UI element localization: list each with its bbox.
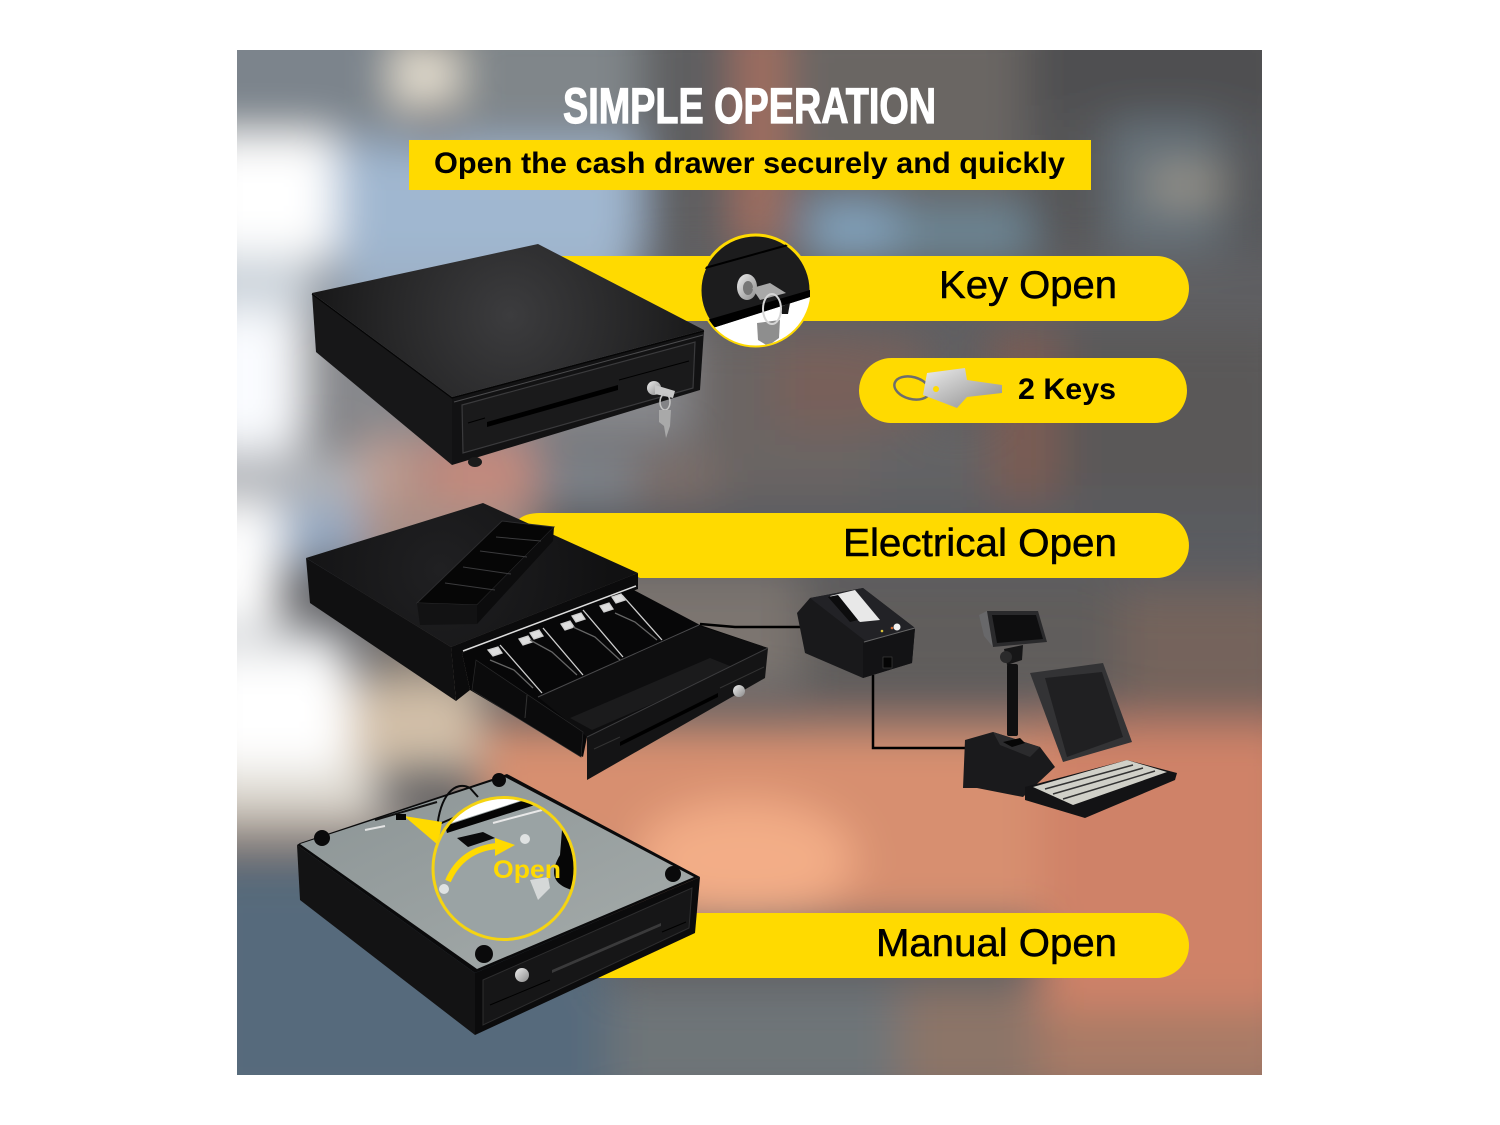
banner: electrical open	[518, 513, 1189, 578]
title: SIMPLE OPERATION	[563, 78, 936, 134]
banner: manual open: Manual Open	[876, 922, 1117, 965]
lower mid	[190, 505, 280, 635]
icon: key	[892, 368, 1002, 408]
pointer to release	[404, 816, 442, 845]
drawer: open with tray	[306, 503, 768, 780]
inset: key in lock	[702, 234, 810, 348]
keyboard	[1025, 760, 1177, 818]
money clips	[463, 586, 662, 693]
label: open: Open	[493, 856, 561, 884]
coin tray	[417, 521, 554, 625]
infographic: simple operation	[237, 50, 1262, 1075]
pill: 2 keys: 2 Keys	[1018, 373, 1116, 406]
banner: key open	[540, 256, 1189, 321]
drawer: closed with key	[312, 244, 704, 467]
mid band	[190, 310, 300, 450]
banner: manual open	[595, 913, 1189, 978]
coin compartment	[538, 626, 768, 737]
top row	[237, 50, 424, 162]
pill: 2 keys	[859, 358, 1187, 423]
blurred store background	[237, 50, 1262, 1075]
arrow: open direction	[448, 838, 515, 881]
printer	[797, 588, 915, 678]
cable: printer to POS terminal	[873, 675, 968, 748]
subtitle banner	[409, 140, 1091, 190]
banner: key open: Key Open	[939, 264, 1117, 307]
left windows and blue band	[190, 135, 335, 260]
rubber feet	[314, 773, 681, 963]
drawer: underside manual release	[297, 773, 700, 1035]
receipt base	[963, 732, 1055, 797]
POS terminal	[963, 611, 1177, 818]
cable: drawer to printer	[700, 624, 800, 627]
customer display	[979, 611, 1047, 647]
monitor	[1030, 663, 1132, 762]
inset: release hatch	[430, 785, 580, 940]
subtitle banner: Open the cash drawer securely and quickly	[434, 147, 1065, 180]
banner: electrical open: Electrical Open	[843, 522, 1117, 565]
salmon floor	[448, 688, 1072, 916]
